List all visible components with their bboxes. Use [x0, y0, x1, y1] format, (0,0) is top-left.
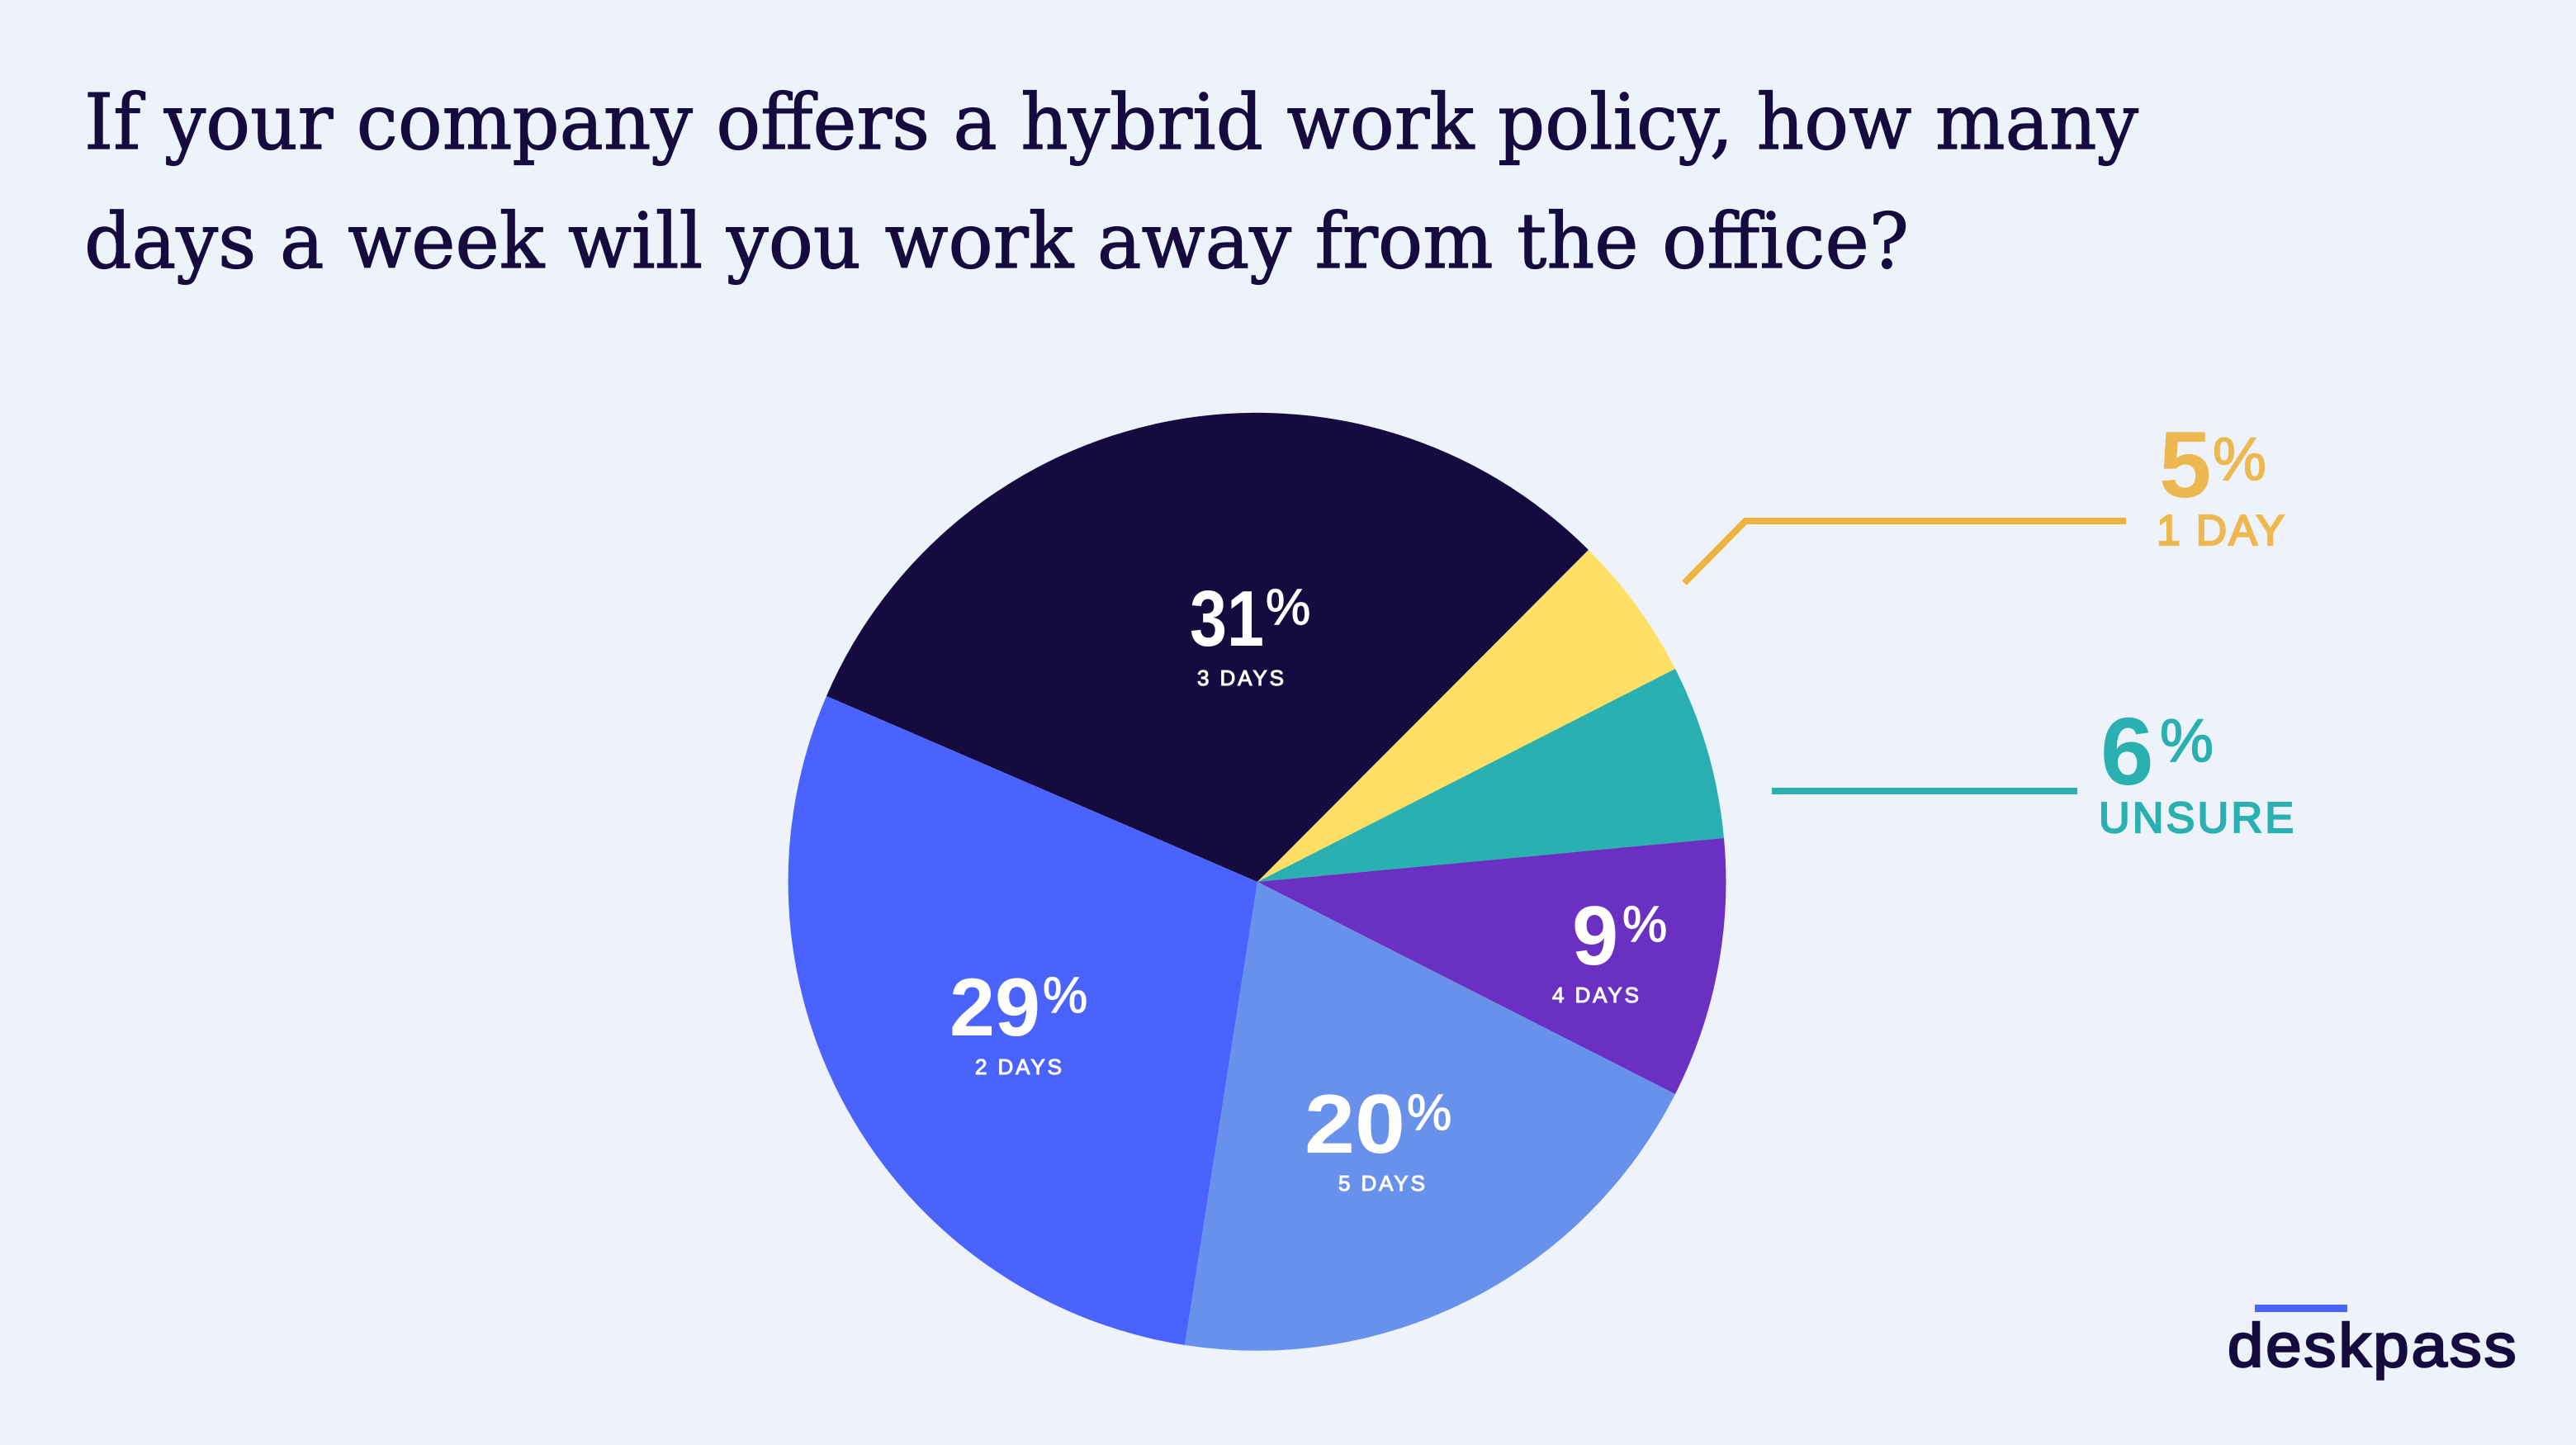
label: 31% 3 days: 31 — [1190, 575, 1264, 663]
label: 31% 3 days — [1190, 575, 1310, 690]
logo bar — [2255, 1305, 2347, 1312]
label: 20% 5 days — [1305, 1078, 1451, 1196]
slice: 1 day 5% — [1257, 550, 1675, 882]
label: 29% 2 days: 29 — [949, 961, 1040, 1053]
label: 20% 5 days: 5 DAYS — [1338, 1171, 1425, 1196]
slice: unsure 6% — [1257, 669, 1724, 882]
slice: 4 days 9% — [1257, 838, 1726, 1094]
label: 9% 4 days: % — [1622, 896, 1667, 952]
callout: 5% 1 day: 5 — [2159, 413, 2211, 518]
callout: 6% unsure: UNSURE — [2099, 794, 2294, 842]
slice: 2 days 29% — [788, 696, 1257, 1345]
callout: 6% unsure — [2099, 698, 2294, 842]
callout line: 1 day — [1684, 521, 2126, 583]
title — [84, 78, 2138, 286]
label: 20% 5 days: % — [1407, 1084, 1451, 1140]
title: days a week will you work away from the office? — [84, 197, 1909, 286]
label: 31% 3 days: 3 DAYS — [1197, 666, 1284, 690]
callout: 5% 1 day — [2157, 413, 2285, 555]
callout line: unsure — [1772, 788, 2077, 794]
callout: 5% 1 day: % — [2213, 426, 2266, 493]
label: 9% 4 days — [1552, 890, 1667, 1007]
label: 20% 5 days: 20 — [1305, 1078, 1405, 1171]
label: 9% 4 days: 4 DAYS — [1552, 983, 1639, 1007]
logo: deskpass — [2228, 1305, 2517, 1381]
logo wordmark: deskpass — [2228, 1312, 2517, 1381]
slice: 3 days 31% — [826, 413, 1589, 882]
label: 29% 2 days — [949, 961, 1087, 1079]
title: If your company offers a hybrid work policy, how many — [84, 78, 2138, 167]
callout: 6% unsure: % — [2160, 708, 2214, 775]
slice: 5 days 20% — [1185, 882, 1675, 1351]
pie chart — [788, 413, 1726, 1351]
callout: 6% unsure: 6 — [2100, 698, 2154, 805]
label: 9% 4 days: 9 — [1572, 890, 1618, 983]
label: 31% 3 days: % — [1266, 579, 1310, 635]
callout: 5% 1 day: 1 DAY — [2157, 507, 2285, 555]
label: 29% 2 days: 2 DAYS — [975, 1054, 1062, 1079]
label: 29% 2 days: % — [1043, 967, 1087, 1023]
